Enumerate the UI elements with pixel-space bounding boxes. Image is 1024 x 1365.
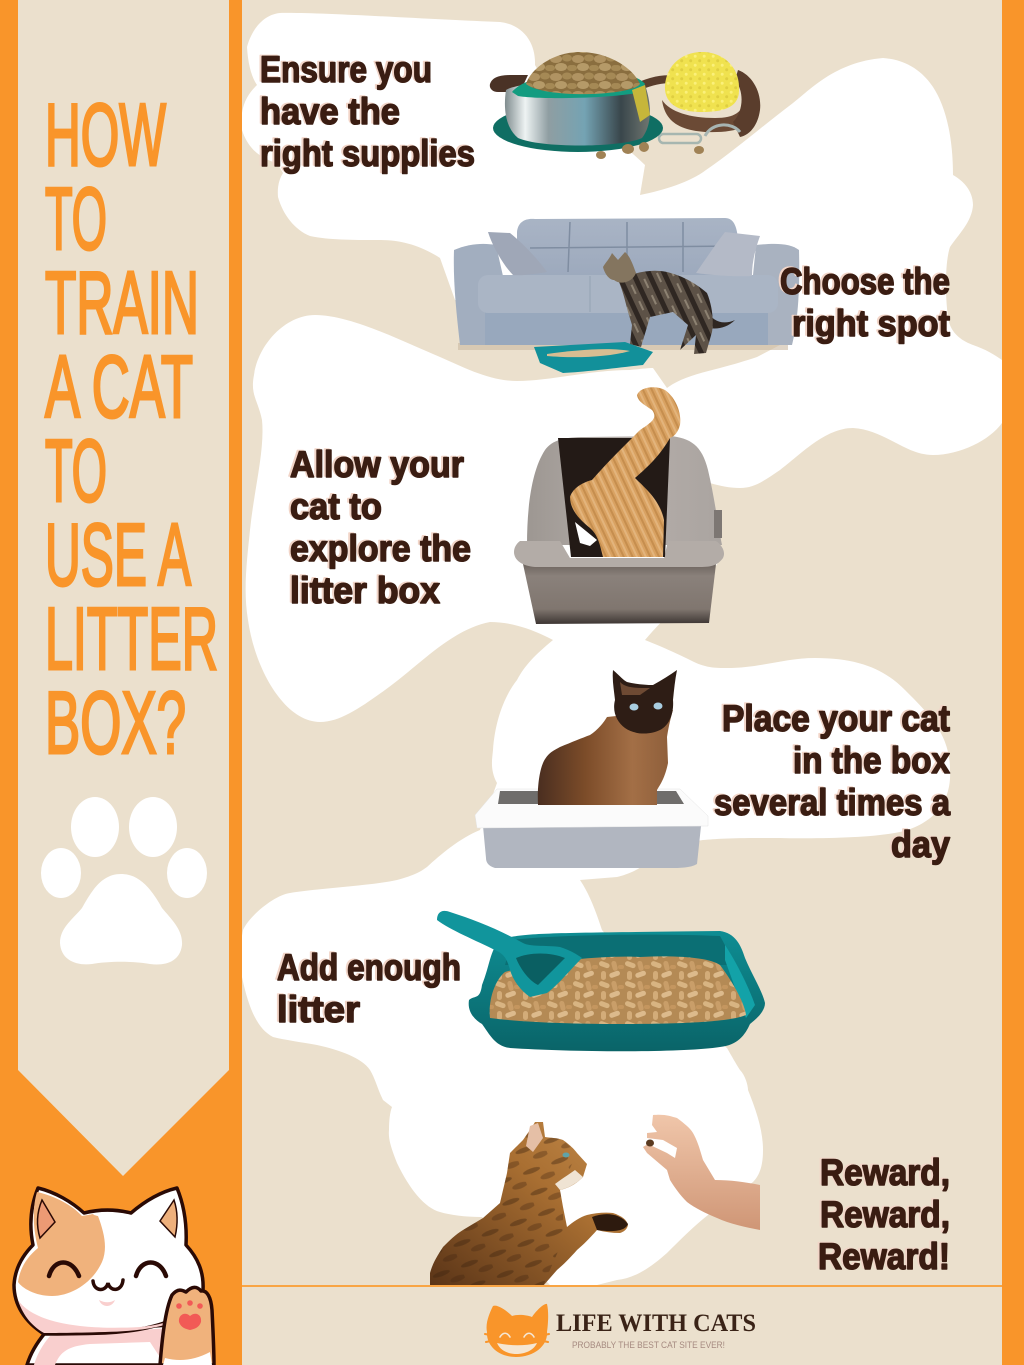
doorway bbox=[558, 438, 670, 557]
title: HOW bbox=[45, 85, 166, 184]
step 6: bengal cat and hand with treat photo bbox=[430, 1115, 760, 1286]
cat head bbox=[613, 670, 677, 734]
title bbox=[45, 85, 218, 772]
left orange sidebar bbox=[0, 0, 242, 1365]
mascot body bbox=[27, 1325, 170, 1365]
bengal cat bbox=[430, 1122, 628, 1286]
hood bbox=[527, 436, 722, 545]
step text: Ensure you have the right supplies: right supplies bbox=[260, 133, 475, 174]
title: BOX? bbox=[45, 673, 186, 772]
mascot: waving calico cat bbox=[14, 1188, 214, 1365]
right orange border bbox=[1002, 0, 1024, 1365]
icon: white paw print bbox=[41, 797, 207, 964]
step text: Ensure you have the right supplies: have the bbox=[260, 91, 400, 132]
step 5: teal tray with wood litter and scoop photo bbox=[437, 911, 765, 1051]
white blobs background bbox=[241, 13, 1002, 1285]
title: TRAIN bbox=[45, 253, 199, 352]
wood pellets bbox=[490, 956, 746, 1024]
step 2: sofa, cat and tray photo bbox=[454, 218, 799, 373]
box interior bbox=[498, 791, 684, 804]
title: TO bbox=[45, 421, 107, 520]
step 1: supplies photo bbox=[490, 52, 760, 159]
step text: Choose the right spot bbox=[780, 261, 950, 344]
step text: Add enough litter: Add enough bbox=[277, 947, 461, 988]
tagline: PROBABLY THE BEST CAT SITE EVER! bbox=[572, 1340, 725, 1350]
step text: Allow your cat to explore the litter box bbox=[290, 444, 471, 611]
title: A CAT bbox=[45, 337, 193, 436]
step text: Choose the right spot: Choose the bbox=[780, 261, 950, 302]
step text: Ensure you have the right supplies: Ensure you bbox=[260, 49, 432, 90]
teal tray bbox=[534, 342, 653, 373]
face bbox=[49, 1262, 166, 1290]
ears inner bbox=[38, 1200, 55, 1238]
footer band bbox=[242, 1285, 1002, 1365]
footer logo bbox=[485, 1304, 756, 1357]
icon: orange smiling cat head bbox=[485, 1304, 549, 1357]
calico patch bbox=[18, 1192, 105, 1296]
step text: Reward, Reward, Reward!: Reward, bbox=[820, 1152, 950, 1193]
step text: Reward, Reward, Reward!: Reward, bbox=[820, 1194, 950, 1235]
step text: Place your cat in the box several times a day: day bbox=[891, 824, 950, 865]
sofa bbox=[454, 218, 799, 350]
title: TO bbox=[45, 169, 107, 268]
step text: Allow your cat to explore the litter box: Allow your bbox=[290, 444, 464, 485]
step text: Allow your cat to explore the litter box: cat to bbox=[290, 486, 382, 527]
orange cat bbox=[570, 387, 680, 557]
step text: Place your cat in the box several times a day: Place your cat bbox=[722, 698, 950, 739]
step text: Allow your cat to explore the litter box: explore the bbox=[290, 528, 471, 569]
step text: Ensure you have the right supplies bbox=[260, 49, 475, 174]
title: USE A bbox=[45, 505, 191, 604]
step 4: siamese cat in white box photo bbox=[475, 670, 708, 868]
site name: LIFE WITH CATS bbox=[556, 1310, 756, 1337]
step text: Place your cat in the box several times a day bbox=[714, 698, 950, 865]
step text: Place your cat in the box several times a day: several times a bbox=[714, 782, 950, 823]
step text: Reward, Reward, Reward! bbox=[818, 1152, 950, 1277]
basin bbox=[483, 826, 701, 868]
step text: Add enough litter bbox=[277, 947, 461, 1030]
mascot head bbox=[14, 1188, 203, 1334]
yellow ball bbox=[665, 52, 739, 112]
hand and arm bbox=[643, 1115, 760, 1230]
basin bbox=[523, 564, 716, 624]
dog bowl bbox=[493, 52, 704, 159]
step text: Reward, Reward, Reward!: Reward! bbox=[818, 1236, 950, 1277]
leash and collar bbox=[490, 70, 760, 143]
step text: Place your cat in the box several times a day: in the box bbox=[793, 740, 950, 781]
title: LITTER bbox=[45, 589, 218, 688]
waving paw bbox=[160, 1287, 214, 1365]
tray bbox=[469, 931, 765, 1051]
step 3: hooded litter box with cat photo bbox=[514, 387, 724, 624]
cat body bbox=[538, 710, 673, 805]
rim bbox=[514, 541, 724, 567]
step text: Choose the right spot: right spot bbox=[792, 303, 950, 344]
step text: Allow your cat to explore the litter box: litter box bbox=[290, 570, 440, 611]
step text: Add enough litter: litter bbox=[277, 989, 360, 1030]
scoop bbox=[437, 911, 582, 997]
side clips bbox=[714, 510, 722, 538]
white rim bbox=[475, 789, 708, 828]
tabby cat bbox=[603, 252, 735, 354]
